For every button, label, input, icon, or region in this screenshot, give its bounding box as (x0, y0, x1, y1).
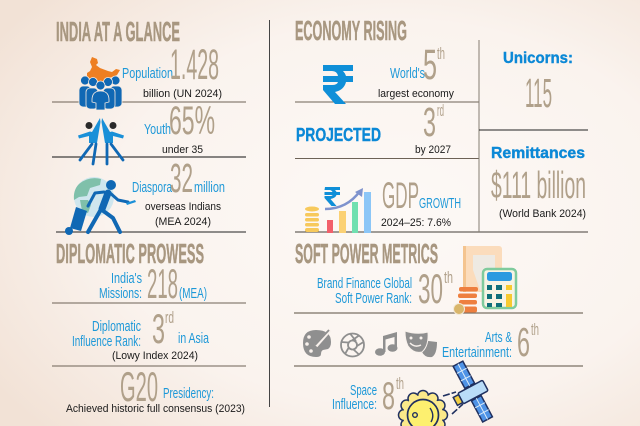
label: Arts &: Arts & (485, 329, 512, 346)
label: Youth: Youth (144, 121, 171, 138)
label: Influence Rank: Influence Rank: (72, 333, 141, 350)
number: 8: 8 (382, 375, 395, 418)
panel: Economy rising: rd (437, 101, 444, 120)
number: 32: 32 (170, 155, 193, 201)
suffix: th: th (437, 44, 445, 63)
number: 65%: 65% (169, 99, 215, 143)
label: Soft Power Rank: Soft Power Rank: (335, 290, 412, 307)
suffix: th: th (396, 374, 404, 393)
label: Missions: Missions: (99, 285, 142, 302)
label: Entertainment: Entertainment: (442, 344, 512, 361)
icon: GDP growth chart (305, 187, 371, 233)
label: in Asia: in Asia (178, 330, 209, 347)
panel: Soft power metrics: SOFT POWER METRICS (295, 238, 438, 269)
icon: India map and crowd (79, 57, 122, 110)
panel: Economy rising (295, 15, 586, 233)
label: Diaspora: Diaspora (132, 179, 172, 196)
icon: rupee (323, 65, 353, 104)
icon: youth high five (78, 118, 124, 164)
panel: Economy rising: 115 (525, 70, 552, 116)
label: India's: India's (111, 270, 142, 287)
number: 3: 3 (423, 99, 436, 145)
label: Remittances: Remittances (491, 145, 585, 162)
label: Diplomatic: Diplomatic (92, 318, 141, 335)
icon: calculator and coins (454, 246, 516, 314)
label: Population: Population (122, 65, 173, 82)
suffix: th: th (531, 320, 539, 339)
number: 30: 30 (418, 265, 443, 312)
panel: India at a glance: 1.428 (170, 41, 219, 89)
label: Space: Space (350, 382, 377, 399)
icon: theatre masks (405, 331, 437, 357)
number: 5: 5 (423, 41, 437, 89)
icon: satellite (440, 357, 500, 426)
number: 3rd in Asia: 3 (152, 305, 165, 352)
label: growth: GROWTH (419, 195, 461, 212)
panel: India at a glance (56, 16, 225, 235)
panel: Diplomatic prowess: G20 (120, 363, 158, 410)
suffix: th: th (444, 268, 453, 287)
label: Presidency: Presidency: (163, 385, 214, 402)
panel: India at a glance: INDIA AT A GLANCE (56, 16, 180, 47)
suffix: rd: rd (165, 308, 174, 327)
caption: under 35: under 35 (162, 144, 203, 156)
caption: largest economy: largest economy (378, 88, 454, 100)
label: projected: PROJECTED (296, 125, 381, 145)
caption: MEA 2024: (MEA 2024) (155, 216, 211, 228)
caption: billion: billion (UN 2024) (143, 88, 222, 100)
number: 6: 6 (517, 319, 530, 365)
caption: overseas Indians: overseas Indians (145, 201, 221, 213)
label: World's: World's (390, 65, 425, 82)
panel: Economy rising: ECONOMY RISING (295, 15, 407, 46)
label: Unicorns: Unicorns: (503, 50, 573, 67)
label: MEA: (MEA) (179, 285, 207, 302)
caption: Lowy Index: (Lowy Index 2024) (112, 350, 198, 362)
panel: Diplomatic prowess (56, 238, 245, 415)
label: Brand Finance Global: Brand Finance Global (317, 275, 412, 292)
icon: sun (398, 390, 448, 426)
caption: consensus: Achieved historic full consensus (2023) (66, 403, 245, 415)
panel: Soft power metrics (295, 238, 539, 426)
icon: camera aperture (341, 334, 364, 356)
label: Influence: Influence: (332, 396, 377, 413)
caption: World Bank: (World Bank 2024) (499, 208, 586, 220)
panel: Economy rising: GDP (382, 175, 419, 216)
panel: Diplomatic prowess: 218 (147, 260, 178, 307)
label: million: million (194, 179, 225, 196)
caption: by 2027: by 2027 (415, 144, 451, 156)
icon: diaspora traveller and globe (65, 177, 136, 235)
icon: music note (375, 332, 398, 356)
caption: GDP rate: 2024–25: 7.6% (381, 217, 451, 229)
panel: Diplomatic prowess: DIPLOMATIC PROWESS (56, 238, 204, 269)
icon: palette (303, 330, 331, 357)
